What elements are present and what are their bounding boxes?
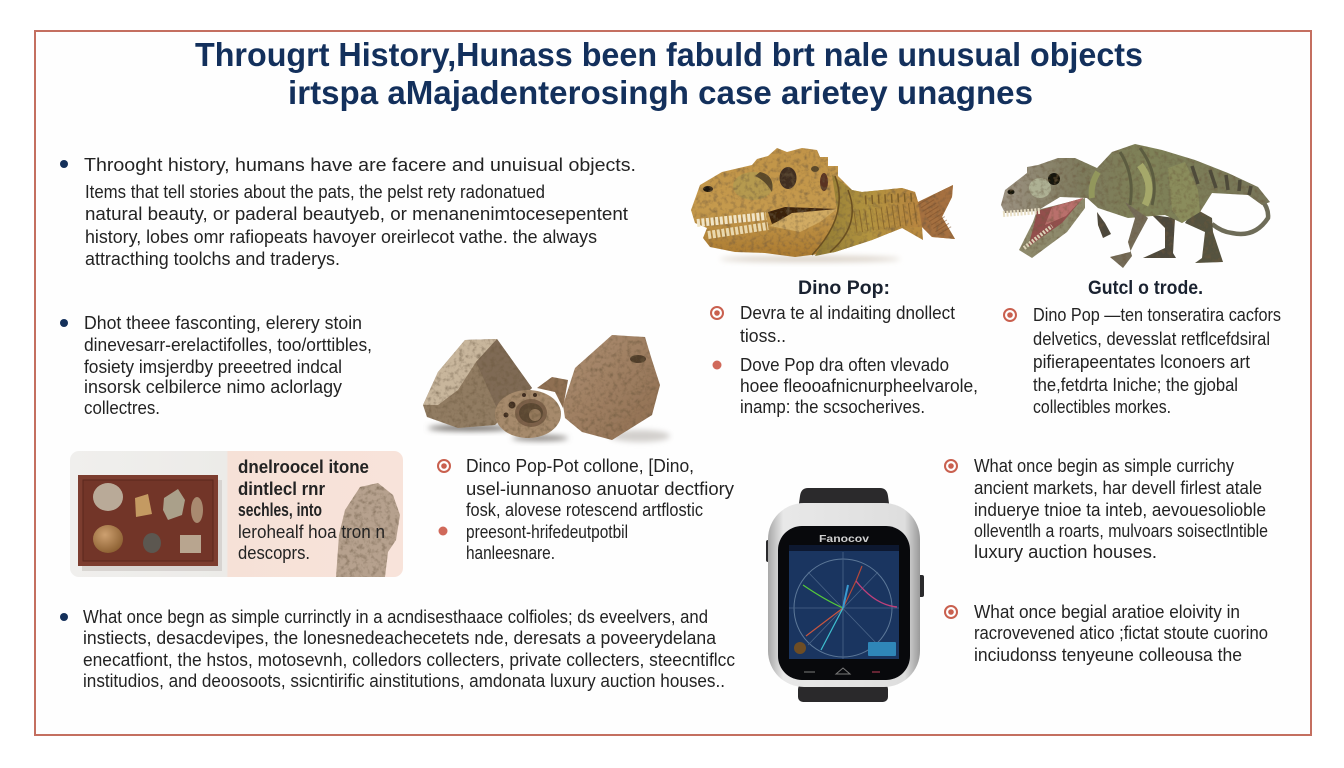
watch label: Fanocov (819, 534, 870, 545)
text block: middle bullets: usel-iunnanoso anuotar dectfiory (466, 479, 734, 499)
image: dinosaur figure (1001, 144, 1270, 268)
heading: right dinosaur: Gutcl o trode. (1088, 278, 1203, 299)
text block: second bullet (60, 313, 372, 418)
text block: middle bullets: Dinco Pop-Pot collone, [Dino, (466, 456, 694, 476)
text block: bottom bullet (60, 607, 735, 691)
panel caption: sechles, into (238, 500, 322, 520)
text block: right upper bullet (945, 456, 1268, 562)
text block: intro bullet: Throoght history, humans have are facere and unuisual objects. (84, 155, 636, 175)
text block: bottom bullet: institudios, and deoosoots, ssicntirific ainstitutions, amdonata luxury auction houses.. (83, 671, 725, 691)
text block: left dinosaur bullets (711, 303, 978, 417)
text block: intro bullet: natural beauty, or paderal beautyeb, or menanenimtocesepentent (85, 204, 628, 224)
text block: second bullet: Dhot theee fasconting, elerery stoin (84, 313, 362, 333)
panel caption: descoprs. (238, 543, 310, 563)
text block: middle bullets: preesont-hrifedeutpotbil (466, 522, 628, 542)
text block: second bullet: fosiety imsjerdby preeetred indcal (84, 357, 342, 377)
title (195, 36, 1143, 111)
icon: wooden specimen tray (78, 475, 222, 571)
image: fossil rocks (423, 335, 670, 442)
title: Througrt History,Hunass been fabuld brt nale unusual objects (195, 36, 1143, 73)
text block: second bullet: collectres. (84, 398, 160, 418)
panel caption: lerohealf hoa tron n (238, 522, 385, 542)
panel caption: dnelroocel itone (238, 457, 369, 477)
text block: right dinosaur bullets (1004, 305, 1281, 417)
text block: middle bullets: fosk, alovese rotescend artflostic (466, 500, 703, 520)
text block: right upper bullet: olleventlh a roarts, mulvoars soisectlntible (974, 521, 1268, 541)
text block: right upper bullet: induerye tnioe ta inteb, aevouesolioble (974, 500, 1266, 520)
text block: left dinosaur bullets: Dove Pop dra often vlevado (740, 355, 949, 375)
text block: right lower bullet (945, 602, 1268, 665)
text block: middle bullets: hanleesnare. (466, 543, 555, 563)
text block: right dinosaur bullets: Dino Pop —ten tonseratira cacfors (1033, 305, 1281, 325)
text block: right dinosaur bullets: delvetics, devesslat retflcefdsiral (1033, 329, 1270, 349)
text block: right upper bullet: ancient markets, har devell firlest atale (974, 478, 1262, 498)
text block: intro bullet: history, lobes omr rafiopeats havoyer oreirlecot vathe. the always (85, 227, 597, 247)
text block: right upper bullet: What once begin as simple currichy (974, 456, 1234, 476)
title: irtspa aMajadenterosingh case arietey unagnes (288, 74, 1033, 111)
watch dial chart (789, 552, 899, 659)
text block: bottom bullet: What once begn as simple currinctly in a acndisesthaace colfioles; ds eveelvers, and (83, 607, 708, 627)
panel caption: dintlecl rnr (238, 479, 325, 499)
text block: left dinosaur bullets: inamp: the scsocherives. (740, 397, 925, 417)
text block: left dinosaur bullets: Devra te al indaiting dnollect (740, 303, 955, 323)
image: dinosaur fish fossil (691, 148, 955, 262)
text block: second bullet: insorsk celbilerce nimo aclorlagy (84, 377, 342, 397)
watch bottom buttons (804, 668, 880, 674)
icon: stone bust (336, 483, 400, 577)
text block: right dinosaur bullets: pifierapeentates lconoers art (1033, 352, 1250, 372)
text block: right dinosaur bullets: the,fetdrta Iniche; the gjobal (1033, 375, 1238, 395)
dino stripes (1003, 148, 1251, 248)
text block: left dinosaur bullets: hoee fleooafnicnurpheelvarole, (740, 376, 978, 396)
text block: right lower bullet: inciudonss tenyeune colleousa the (974, 645, 1242, 665)
text block: bottom bullet: enecatfiont, the hstos, motosevnh, colledors collecters, private collecters, steecntiflcc (83, 650, 735, 670)
text block: intro bullet (60, 155, 636, 269)
text block: intro bullet: Items that tell stories about the pats, the pelst rety radonatued (85, 182, 545, 202)
dino teeth (697, 176, 945, 255)
text block: right dinosaur bullets: collectibles morkes. (1033, 397, 1171, 417)
text block: intro bullet: attracthing toolchs and traderys. (85, 249, 340, 269)
text block: left dinosaur bullets: tioss.. (740, 326, 786, 346)
text block: right upper bullet: luxury auction houses. (974, 542, 1157, 562)
text block: second bullet: dinevesarr-erelactifolles, too/orttibles, (84, 335, 372, 355)
image: smartwatch (766, 488, 924, 702)
text block: right lower bullet: racrovevened atico ;fictat stoute cuorino (974, 623, 1268, 643)
heading: left dinosaur: Dino Pop: (798, 278, 890, 299)
text block: right lower bullet: What once begial aratioe eloivity in (974, 602, 1240, 622)
panel: collection tray and bust (70, 451, 403, 577)
text block: middle bullets (438, 456, 734, 563)
text block: bottom bullet: instiects, desacdevipes, the lonesnedeachecetets nde, deresats a poveerydelana (83, 628, 717, 648)
panel caption (238, 457, 385, 563)
